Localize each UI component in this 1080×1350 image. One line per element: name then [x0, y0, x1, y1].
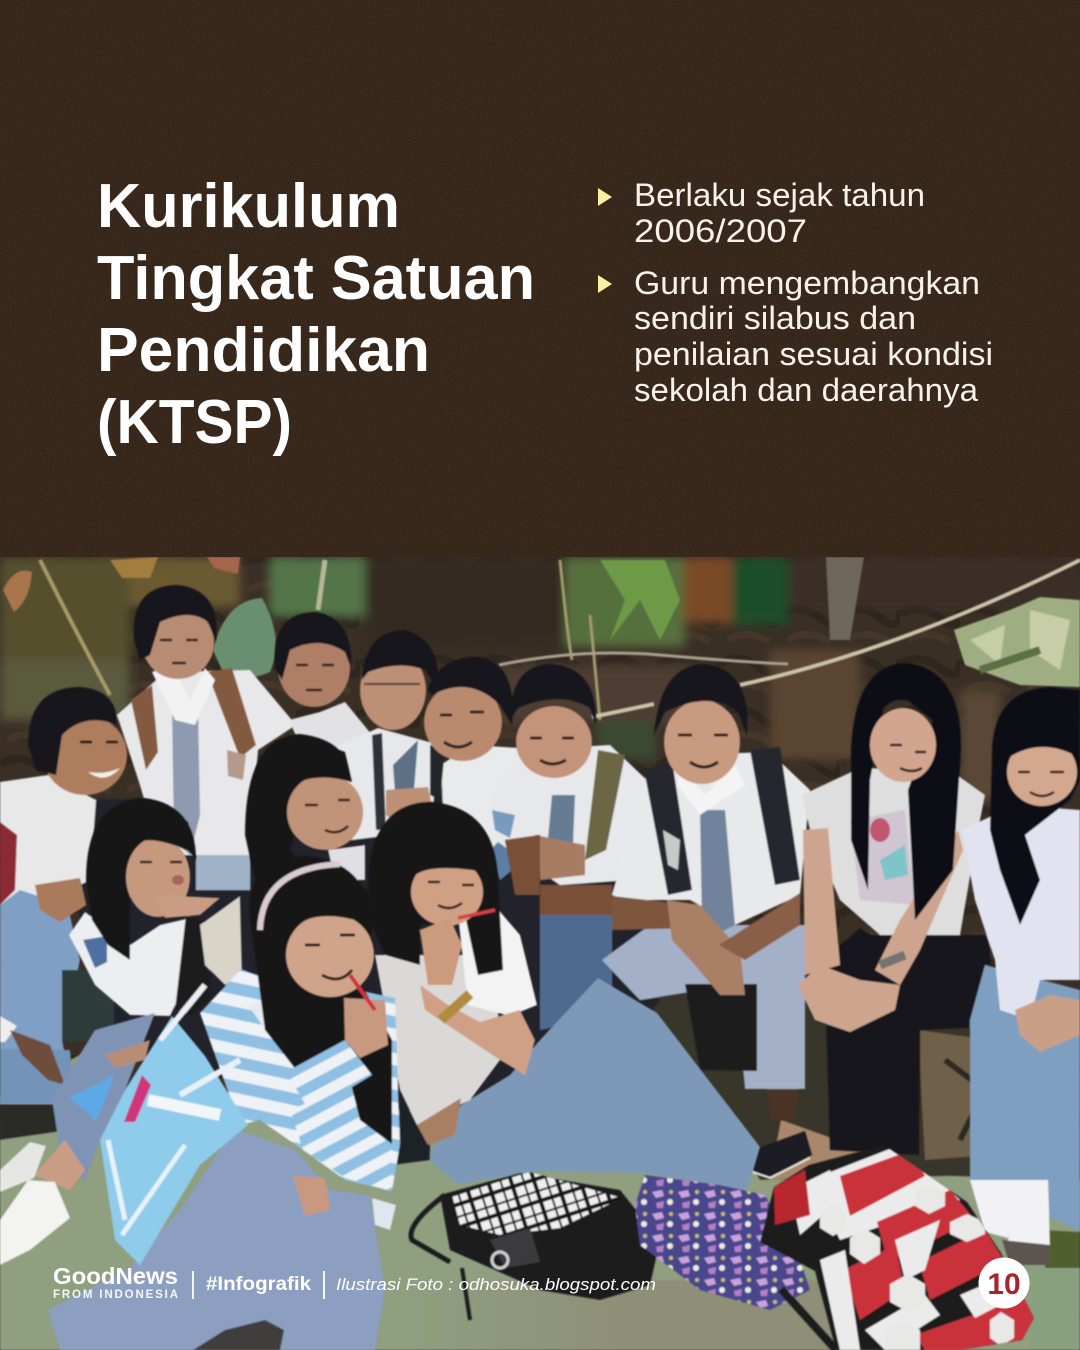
bullet list — [598, 177, 993, 408]
boy giving peace sign — [489, 664, 652, 1030]
white shoes at left — [0, 1142, 70, 1265]
blue skirt of sitting girl — [427, 978, 760, 1191]
photo ground — [0, 990, 1080, 1350]
bullet 2 text: sekolah dan daerahnya — [634, 372, 978, 408]
girl with lollipop — [368, 802, 537, 1145]
rope and roots — [499, 560, 1080, 717]
girl blowing kiss — [69, 798, 220, 1016]
logo: GoodNews from Indonesia: GoodNews — [53, 1263, 178, 1289]
bullet 1 text: 2006/2007 — [634, 213, 807, 249]
black handbag — [411, 1172, 660, 1320]
title: Tingkat Satuan — [97, 244, 535, 313]
black shoe at bottom of skirt — [193, 1320, 284, 1350]
girl on right — [962, 687, 1080, 1265]
title: Pendidikan — [97, 316, 430, 385]
panel: brown textured header background — [0, 0, 1080, 557]
red black white patterned bag — [759, 1148, 1035, 1350]
boy with brown straps — [117, 585, 296, 890]
bullet 2 text: Guru mengembangkan — [634, 265, 980, 301]
hashtag: #Infografik — [206, 1274, 311, 1295]
front row students — [0, 734, 1050, 1350]
bullet 2 text — [634, 265, 993, 408]
girl with dark long hair behind — [245, 734, 365, 880]
title: Kurikulum — [97, 172, 400, 241]
logo: GoodNews from Indonesia: FROM INDONESIA — [53, 1289, 178, 1301]
purple patterned bag — [635, 1175, 810, 1310]
dark backing between bodies — [78, 792, 660, 1110]
boy with glasses — [334, 630, 440, 840]
page number badge: 10 — [987, 1268, 1021, 1301]
dark gap behind girls — [392, 1110, 430, 1165]
photo credit: Ilustrasi Foto : odhosuka.blogspot.com — [336, 1275, 656, 1294]
bullet icon 2 — [598, 275, 612, 293]
girl in striped cardigan — [200, 856, 400, 1230]
bullet icon 1 — [598, 188, 612, 206]
bullet 1 text — [634, 177, 925, 249]
back row students — [0, 585, 1080, 1265]
title — [97, 172, 535, 457]
boy with black backpack — [602, 664, 812, 1178]
black bag strap on ground — [781, 1289, 836, 1350]
bullet 2 text: penilaian sesuai kondisi — [634, 336, 993, 372]
page number badge — [978, 1258, 1030, 1308]
girl in white tee — [798, 663, 990, 1155]
beige backpack — [200, 896, 242, 985]
photo background: rock wall and foliage — [0, 557, 1080, 1088]
arm of boy behind girls — [505, 835, 540, 895]
leaves and plants — [3, 557, 1080, 720]
boy behind center — [275, 612, 372, 750]
bullet 2 text: sendiri silabus dan — [634, 300, 916, 336]
bullet 1 text: Berlaku sejak tahun — [634, 177, 925, 213]
light blue handbag — [69, 985, 248, 1265]
footer: brand and credit — [53, 1263, 656, 1301]
logo: GoodNews from Indonesia — [53, 1263, 178, 1301]
boy center — [423, 656, 520, 881]
long skirt of front girl — [48, 1129, 385, 1350]
photo: group of students in school uniform — [0, 557, 1080, 1350]
title: (KTSP) — [97, 388, 292, 457]
boy smiling on left — [0, 687, 127, 1104]
